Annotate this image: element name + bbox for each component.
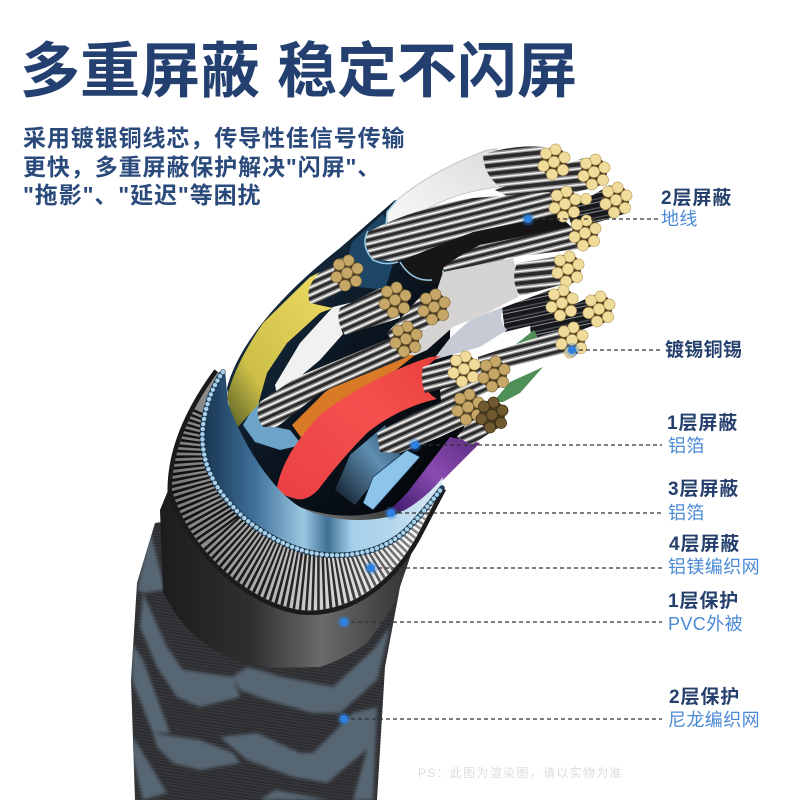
PVC jacket <box>160 420 420 668</box>
strand to wire D <box>514 256 572 296</box>
rear blue sleeves <box>340 214 400 290</box>
red wire <box>277 356 441 499</box>
copper light bundles <box>448 144 632 387</box>
copper mid bundles <box>331 255 510 425</box>
description text <box>23 125 405 208</box>
strand behind top <box>495 158 592 205</box>
title: 稳定不闪屏 <box>277 38 577 105</box>
label: shield layer 1 <box>667 412 738 456</box>
strand from white wire <box>338 288 400 335</box>
strand C <box>443 226 585 284</box>
large grey-white wire <box>400 258 518 362</box>
grey-blue wire <box>433 307 507 360</box>
inner cavity <box>227 200 465 516</box>
strand behind red <box>440 362 498 412</box>
black wire <box>400 212 575 285</box>
title: 多重屏蔽 <box>20 38 260 105</box>
white wire top <box>387 149 500 232</box>
copper dark bundle <box>476 397 508 433</box>
label: protection layer 2 <box>668 686 760 730</box>
purple wire <box>390 437 480 512</box>
sleeve rims top <box>365 200 452 284</box>
label: protection layer 2: 尼龙编织网 <box>668 710 760 730</box>
marker dots <box>338 212 579 726</box>
silver shield braid <box>172 372 442 610</box>
description text: 采用镀银铜线芯，传导性佳信号传输 <box>23 125 405 151</box>
ring beads <box>202 372 442 555</box>
red strand <box>422 355 465 393</box>
description text: 更快，多重屏蔽保护解决"闪屏"、 <box>23 154 381 180</box>
footnote: PS：此图为渲染图，请以实物为准 <box>418 765 623 780</box>
dark strand <box>502 290 562 332</box>
title <box>20 38 577 105</box>
label: shield layer 4: 4层屏蔽 <box>669 533 740 555</box>
metal blue wire <box>335 425 400 505</box>
long strand B <box>366 192 555 262</box>
top wire mouth and strand <box>483 146 552 187</box>
label: shield layer 3: 3层屏蔽 <box>668 478 739 500</box>
strand next to it <box>387 297 440 345</box>
green wire <box>493 330 543 402</box>
label: tinned copper: 镀锡铜锡 <box>665 339 742 361</box>
label: shield layer 3: 铝箔 <box>668 503 705 523</box>
light blue wire <box>363 450 420 510</box>
white wire mid <box>275 302 353 395</box>
label: shield layer 3 <box>668 478 739 523</box>
strand L <box>377 395 476 453</box>
cable illustration <box>125 144 632 800</box>
wires <box>227 144 632 512</box>
label: shield layer 4: 铝镁编织网 <box>668 557 760 577</box>
label: shield layer 2: 地线 <box>661 209 698 229</box>
label: protection layer 1: 1层保护 <box>668 590 739 612</box>
nylon braided jacket <box>131 522 400 800</box>
purple strand <box>457 403 497 445</box>
label: protection layer 2: 2层保护 <box>669 686 740 708</box>
yellow wire <box>227 272 333 430</box>
label: shield layer 2: 2层屏蔽 <box>661 187 732 209</box>
leader lines and markers <box>338 212 664 726</box>
long strand F <box>258 337 407 427</box>
label: protection layer 1: PVC外被 <box>668 614 743 634</box>
blue metal ring <box>202 370 443 555</box>
orange wire <box>292 355 415 440</box>
strand right lower <box>478 328 570 374</box>
label: shield layer 2 <box>661 187 732 229</box>
label: protection layer 1 <box>668 590 743 634</box>
label: shield layer 4 <box>668 533 760 577</box>
label: shield layer 1: 铝箔 <box>668 436 705 456</box>
dark strand right <box>565 185 627 230</box>
label: shield layer 1: 1层屏蔽 <box>667 412 738 434</box>
yellow strand <box>303 258 352 308</box>
description text: "拖影"、"延迟"等困扰 <box>23 182 261 208</box>
